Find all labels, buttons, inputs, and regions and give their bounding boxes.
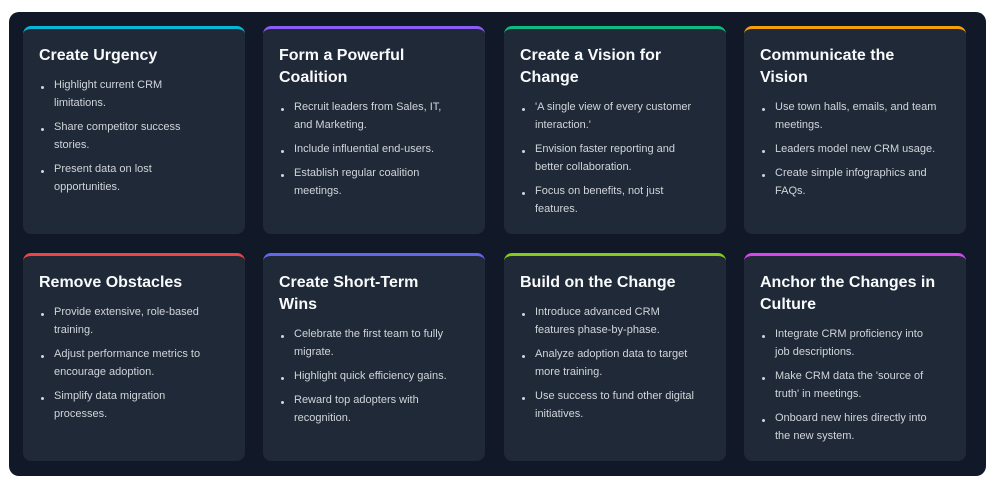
- card: Remove Obstacles: training.: [54, 324, 93, 336]
- card: Create Short-Term Wins: Highlight quick efficiency gains.: [294, 370, 447, 382]
- card: Form a Powerful Coalition: meetings.: [294, 185, 342, 197]
- card: Form a Powerful Coalition: Establish regular coalition: [294, 167, 419, 179]
- card: Create a Vision for Change: features.: [535, 203, 578, 215]
- card: Communicate the Vision: Communicate the: [760, 47, 894, 64]
- card: Form a Powerful Coalition: Include influential end-users.: [294, 143, 434, 155]
- card: Create Short-Term Wins: [263, 253, 485, 461]
- card: Communicate the Vision: FAQs.: [775, 185, 806, 197]
- card: Remove Obstacles: Simplify data migration: [54, 390, 165, 402]
- card: Remove Obstacles: encourage adoption.: [54, 366, 154, 378]
- card: Build on the Change: Analyze adoption data to target: [535, 348, 687, 360]
- card: Anchor the Changes in Culture: Onboard new hires directly into: [775, 412, 927, 424]
- card: Create Urgency: opportunities.: [54, 181, 120, 193]
- card: Create Short-Term Wins: Celebrate the first team to fully: [294, 328, 443, 340]
- card: Create a Vision for Change: [504, 26, 726, 234]
- card: Build on the Change: initiatives.: [535, 408, 583, 420]
- card: Create Urgency: stories.: [54, 139, 89, 151]
- card: Create a Vision for Change: Envision faster reporting and: [535, 143, 675, 155]
- card: Communicate the Vision: Vision: [760, 69, 808, 86]
- card: Form a Powerful Coalition: Form a Powerful: [279, 47, 404, 64]
- card: Form a Powerful Coalition: and Marketing.: [294, 119, 367, 131]
- card: Build on the Change: more training.: [535, 366, 602, 378]
- card: Create Short-Term Wins: recognition.: [294, 412, 351, 424]
- card: Create Short-Term Wins: Reward top adopters with: [294, 394, 419, 406]
- card: Communicate the Vision: Leaders model new CRM usage.: [775, 143, 935, 155]
- card: Create Urgency: limitations.: [54, 97, 106, 109]
- card: Anchor the Changes in Culture: [744, 253, 966, 461]
- card: Create a Vision for Change: 'A single view of every customer: [535, 101, 691, 113]
- card: Anchor the Changes in Culture: Anchor the Changes in: [760, 274, 935, 291]
- card: Remove Obstacles: processes.: [54, 408, 107, 420]
- card: Build on the Change: Build on the Change: [520, 274, 676, 291]
- card: Communicate the Vision: Use town halls, emails, and team: [775, 101, 936, 113]
- card: Create a Vision for Change: Change: [520, 69, 579, 86]
- card: Create Urgency: Present data on lost: [54, 163, 152, 175]
- card: Form a Powerful Coalition: [263, 26, 485, 234]
- card: Anchor the Changes in Culture: Culture: [760, 296, 816, 313]
- card: Anchor the Changes in Culture: the new system.: [775, 430, 854, 442]
- card: Create Urgency: Highlight current CRM: [54, 79, 162, 91]
- card: Create a Vision for Change: interaction.': [535, 119, 591, 131]
- card: Remove Obstacles: [23, 253, 245, 461]
- card: Communicate the Vision: meetings.: [775, 119, 823, 131]
- card: Create Short-Term Wins: migrate.: [294, 346, 334, 358]
- card: Anchor the Changes in Culture: Make CRM data the 'source of: [775, 370, 923, 382]
- card: Remove Obstacles: Adjust performance metrics to: [54, 348, 200, 360]
- card: Create Urgency: Share competitor success: [54, 121, 181, 133]
- card: Remove Obstacles: Provide extensive, role-based: [54, 306, 199, 318]
- card: Communicate the Vision: [744, 26, 966, 234]
- card: Anchor the Changes in Culture: Integrate CRM proficiency into: [775, 328, 923, 340]
- card: Build on the Change: Introduce advanced CRM: [535, 306, 660, 318]
- card: Anchor the Changes in Culture: job descriptions.: [775, 346, 854, 358]
- card: Create Urgency: Create Urgency: [39, 47, 157, 64]
- card: Build on the Change: [504, 253, 726, 461]
- card: Remove Obstacles: Remove Obstacles: [39, 274, 182, 291]
- card: Anchor the Changes in Culture: truth' in meetings.: [775, 388, 861, 400]
- card: Communicate the Vision: Create simple infographics and: [775, 167, 927, 179]
- card: Create a Vision for Change: Focus on benefits, not just: [535, 185, 663, 197]
- card: Form a Powerful Coalition: Coalition: [279, 69, 347, 86]
- card: Build on the Change: features phase-by-phase.: [535, 324, 660, 336]
- card: Create a Vision for Change: Create a Vision for: [520, 47, 661, 64]
- card: Create Short-Term Wins: Wins: [279, 296, 317, 313]
- card: Create Urgency: [23, 26, 245, 234]
- card: Create Short-Term Wins: Create Short-Term: [279, 274, 418, 291]
- card: Build on the Change: Use success to fund other digital: [535, 390, 694, 402]
- card: Form a Powerful Coalition: Recruit leaders from Sales, IT,: [294, 101, 441, 113]
- card: Create a Vision for Change: better collaboration.: [535, 161, 632, 173]
